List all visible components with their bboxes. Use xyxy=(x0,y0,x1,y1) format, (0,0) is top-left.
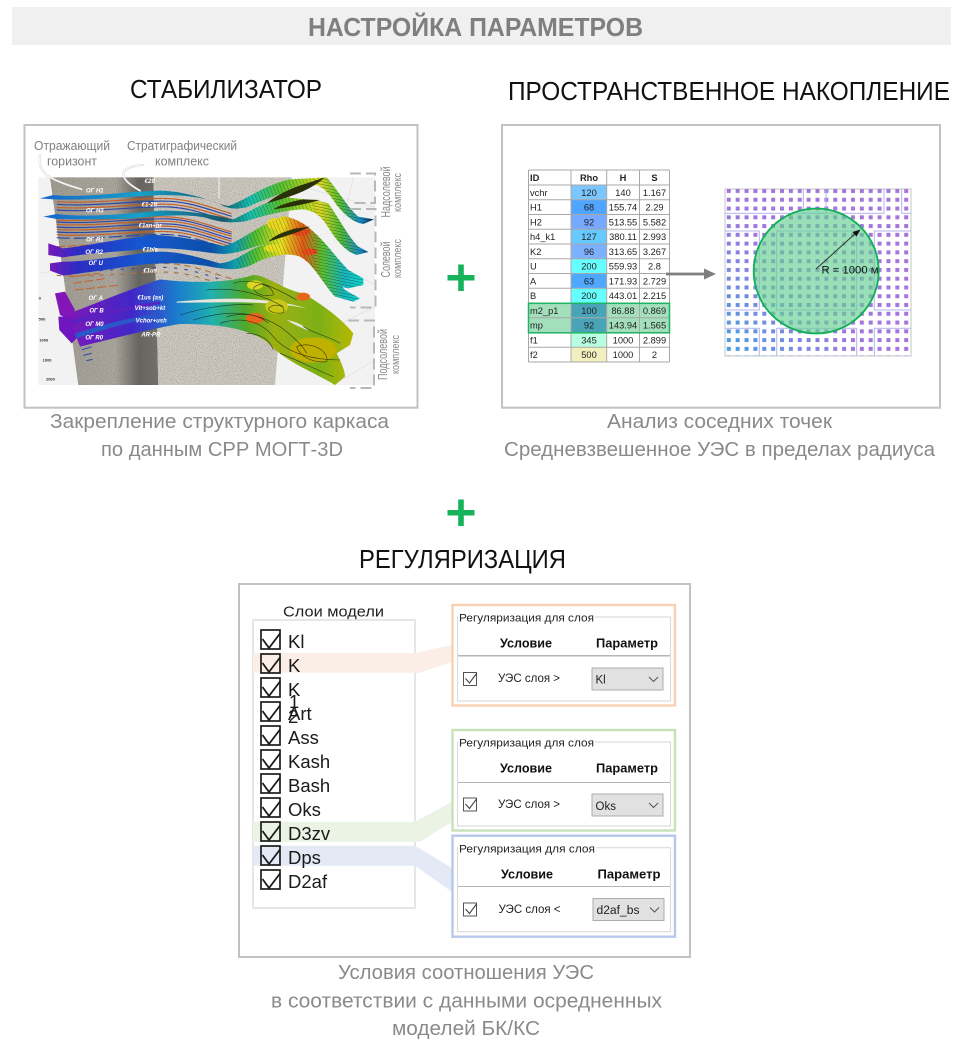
table text: 200 xyxy=(581,262,597,272)
table text: 92 xyxy=(584,218,594,228)
layer names: Oks xyxy=(288,799,321,820)
annotation: stratigraphic complex: комплекс xyxy=(155,154,209,168)
table grid xyxy=(528,170,670,362)
depth axis ticks: 0 xyxy=(39,295,42,300)
table text: 500 xyxy=(581,350,597,360)
3D seismic model xyxy=(38,155,377,385)
regularization card: orange: Регуляризация для слоя xyxy=(459,612,594,624)
table text: 1.565 xyxy=(643,321,666,331)
caption: stabilizer: по данным СРР МОГТ-3D xyxy=(101,439,343,461)
regularization card: blue xyxy=(452,836,675,937)
table text: 2.29 xyxy=(645,203,664,213)
horizon and complex labels: €2tl xyxy=(145,179,155,185)
side label: salt complex xyxy=(378,239,404,278)
side label: sub-salt complex xyxy=(375,329,402,380)
caption: spatial accumulation xyxy=(504,411,936,461)
horizon and complex labels: Vchor+ush xyxy=(136,319,167,325)
table text: K2 xyxy=(530,247,541,257)
horizon and complex labels: ОГ M0 xyxy=(85,322,104,328)
horizon and complex labels: €1-2lt xyxy=(142,203,158,209)
title banner xyxy=(12,7,951,45)
table text: 3.267 xyxy=(643,247,666,257)
panel: spatial accumulation xyxy=(502,125,940,408)
annotation: reflecting horizon xyxy=(34,139,110,168)
horizon and complex labels: ОГ R0 xyxy=(85,335,104,341)
layer names: Kash xyxy=(288,751,330,772)
table text: 0.869 xyxy=(643,306,666,316)
horizon and complex labels: ОГ R1 xyxy=(86,237,104,243)
annotation: stratigraphic complex xyxy=(127,139,237,168)
connector band: green xyxy=(253,802,452,842)
table text: h4_k1 xyxy=(530,232,555,242)
regularization card: green: Параметр xyxy=(596,762,658,776)
table text: f2 xyxy=(530,350,538,360)
regularization card: blue: УЭС слоя < xyxy=(498,904,561,916)
title banner: НАСТРОЙКА ПАРАМЕТРОВ xyxy=(308,12,643,42)
panel: stabilizer xyxy=(24,125,418,408)
table text: S xyxy=(651,173,658,183)
icon: plus between panels xyxy=(448,264,474,291)
horizon and complex labels: €1us xyxy=(143,268,158,274)
icon: plus above regularization xyxy=(448,500,474,526)
table text: 171.93 xyxy=(609,276,637,286)
regularization card: orange: УЭС слоя > xyxy=(498,673,560,685)
caption: spatial accumulation: Средневзвешенное УЭС в пределах радиуса xyxy=(504,439,936,461)
regularization card: green: Регуляризация для слоя xyxy=(459,738,594,750)
side label: salt complex: комплекс xyxy=(392,239,404,278)
table text: 5.582 xyxy=(643,218,666,228)
annotation: reflecting horizon: горизонт xyxy=(47,154,97,168)
table text: 513.55 xyxy=(609,218,637,228)
caption: regularization: Условия соотношения УЭС xyxy=(338,962,594,984)
table text: m2_p1 xyxy=(530,306,558,316)
table text: 63 xyxy=(584,276,594,286)
table text: 1.167 xyxy=(643,188,666,198)
table text: f1 xyxy=(530,336,538,346)
table text xyxy=(530,173,666,360)
horizon and complex labels: €1an+br xyxy=(139,223,162,229)
table text: 2.729 xyxy=(643,276,666,286)
horizon and complex labels: ОГ U xyxy=(89,261,104,267)
data table xyxy=(528,170,670,362)
regularization card: blue: d2af_bs xyxy=(596,905,640,917)
layer names: K xyxy=(288,655,301,676)
table text: 86.88 xyxy=(611,306,635,316)
layer names: Kl xyxy=(288,631,304,652)
caption: regularization: в соответствии с данными осредненных xyxy=(271,990,662,1012)
table text: Rho xyxy=(580,173,598,183)
table text: 92 xyxy=(584,321,594,331)
radius arrow xyxy=(816,230,860,269)
Rho column colours xyxy=(528,185,670,362)
heading: stabilizer: СТАБИЛИЗАТОР xyxy=(130,74,322,104)
table text: 143.94 xyxy=(609,321,637,331)
horizon and complex labels: AR-PR xyxy=(140,333,161,339)
table text: 68 xyxy=(584,203,594,213)
regularization card: blue: Параметр xyxy=(598,868,661,882)
side label: sub-salt complex: комплекс xyxy=(390,335,402,374)
table text: 2.215 xyxy=(643,291,666,301)
table text: 127 xyxy=(581,232,597,242)
layer names xyxy=(288,631,331,892)
table text: 2.8 xyxy=(648,262,661,272)
table text: B xyxy=(530,291,536,301)
table text: 1000 xyxy=(613,336,633,346)
regularization card: orange: Kl xyxy=(596,674,606,686)
arrow xyxy=(666,268,716,280)
depth axis ticks: 1000 xyxy=(43,357,52,362)
layer names: K xyxy=(288,679,301,700)
point grid map xyxy=(724,188,912,356)
horizon and complex labels xyxy=(85,179,167,341)
table text: 155.74 xyxy=(609,203,637,213)
horizon and complex labels: ОГ A xyxy=(89,296,103,302)
layer names: Ass xyxy=(288,727,319,748)
depth axis ticks: 500 xyxy=(39,316,46,321)
horizon and complex labels: ОГ R2 xyxy=(85,250,104,256)
highlighted rows outline xyxy=(528,303,670,333)
horizon and complex labels: Vlt+sob+kt xyxy=(135,306,166,312)
regularization card: green: Условие xyxy=(500,762,552,776)
table text: 140 xyxy=(615,188,631,198)
layer names: 1 xyxy=(289,691,299,712)
callout arrows xyxy=(40,155,143,191)
regularization card: orange: Условие xyxy=(500,636,552,650)
layer names: D3zv xyxy=(288,823,331,844)
table text: 100 xyxy=(581,306,597,316)
table text: 313.65 xyxy=(609,247,637,257)
caption: regularization: моделей БК/КС xyxy=(392,1018,540,1040)
panel: regularization xyxy=(239,584,690,957)
horizon and complex labels: €1bls xyxy=(143,247,159,253)
horizon and complex labels: €1us (as) xyxy=(137,295,163,301)
depth axis ticks: 2000 xyxy=(46,377,56,382)
dashed brackets xyxy=(348,174,376,388)
regularization card: orange xyxy=(452,605,675,706)
table text: 345 xyxy=(581,336,597,346)
search radius circle xyxy=(754,208,879,334)
regularization card: blue: Регуляризация для слоя xyxy=(459,844,595,856)
layer names: Art xyxy=(288,703,312,724)
regularization card: orange: Параметр xyxy=(596,636,658,650)
caption: spatial accumulation: Анализ соседних точек xyxy=(607,411,832,433)
layers heading: Слои модели xyxy=(283,604,384,620)
side label: salt complex: Солевой xyxy=(378,242,393,278)
depth axis ticks xyxy=(39,295,56,382)
depth axis ticks: 1000 xyxy=(39,337,49,342)
point grid map: R = 1000 м xyxy=(822,264,878,276)
heading: spatial accumulation: ПРОСТРАНСТВЕННОЕ НАКОПЛЕНИЕ xyxy=(508,76,950,106)
regularization card: green xyxy=(452,730,675,830)
table text: H xyxy=(620,173,627,183)
layer checkboxes xyxy=(261,630,280,889)
horizon and complex labels: ОГ B xyxy=(89,309,104,315)
side label: sub-salt complex: Подсолевой xyxy=(375,329,390,380)
table text: A xyxy=(530,276,537,286)
layer names: Dps xyxy=(288,847,321,868)
table text: 443.01 xyxy=(609,291,637,301)
caption: stabilizer: Закрепление структурного каркаса xyxy=(50,411,390,433)
annotation: reflecting horizon: Отражающий xyxy=(34,139,110,153)
table text: ID xyxy=(530,173,540,183)
layer names: Bash xyxy=(288,775,330,796)
layer names: 2 xyxy=(288,706,298,727)
table text: 120 xyxy=(581,188,597,198)
table text: H2 xyxy=(530,218,542,228)
layers list box xyxy=(253,620,415,908)
table text: H1 xyxy=(530,203,542,213)
table text: 1000 xyxy=(613,350,633,360)
table text: 559.93 xyxy=(609,262,637,272)
contour lines xyxy=(237,177,377,307)
table text: 2 xyxy=(652,350,657,360)
table text: U xyxy=(530,262,537,272)
table text: mp xyxy=(530,321,543,331)
horizon and complex labels: ОГ Н3 xyxy=(86,208,104,214)
layer names: D2af xyxy=(288,871,328,892)
table text: 380.11 xyxy=(609,232,637,242)
table text: 2.899 xyxy=(643,336,666,346)
table text: 96 xyxy=(584,247,594,257)
connector band: blue xyxy=(253,846,452,892)
table text: 200 xyxy=(581,291,597,301)
annotation: stratigraphic complex: Стратиграфический xyxy=(127,139,237,153)
heading: regularization: РЕГУЛЯРИЗАЦИЯ xyxy=(359,544,566,574)
regularization card: green: Oks xyxy=(596,801,616,813)
table text: vchr xyxy=(530,188,548,198)
caption: regularization xyxy=(271,962,662,1040)
table text: 2.993 xyxy=(643,232,666,242)
side label: supra-salt complex xyxy=(378,166,404,218)
connector band: orange xyxy=(253,645,452,673)
side label: supra-salt complex: Надсолевой xyxy=(378,167,393,218)
horizon and complex labels: ОГ Н1 xyxy=(86,188,104,194)
caption: stabilizer xyxy=(50,411,390,461)
regularization card: green: УЭС слоя > xyxy=(498,799,560,811)
side label: supra-salt complex: комплекс xyxy=(392,173,404,212)
regularization card: blue: Условие xyxy=(501,868,553,882)
